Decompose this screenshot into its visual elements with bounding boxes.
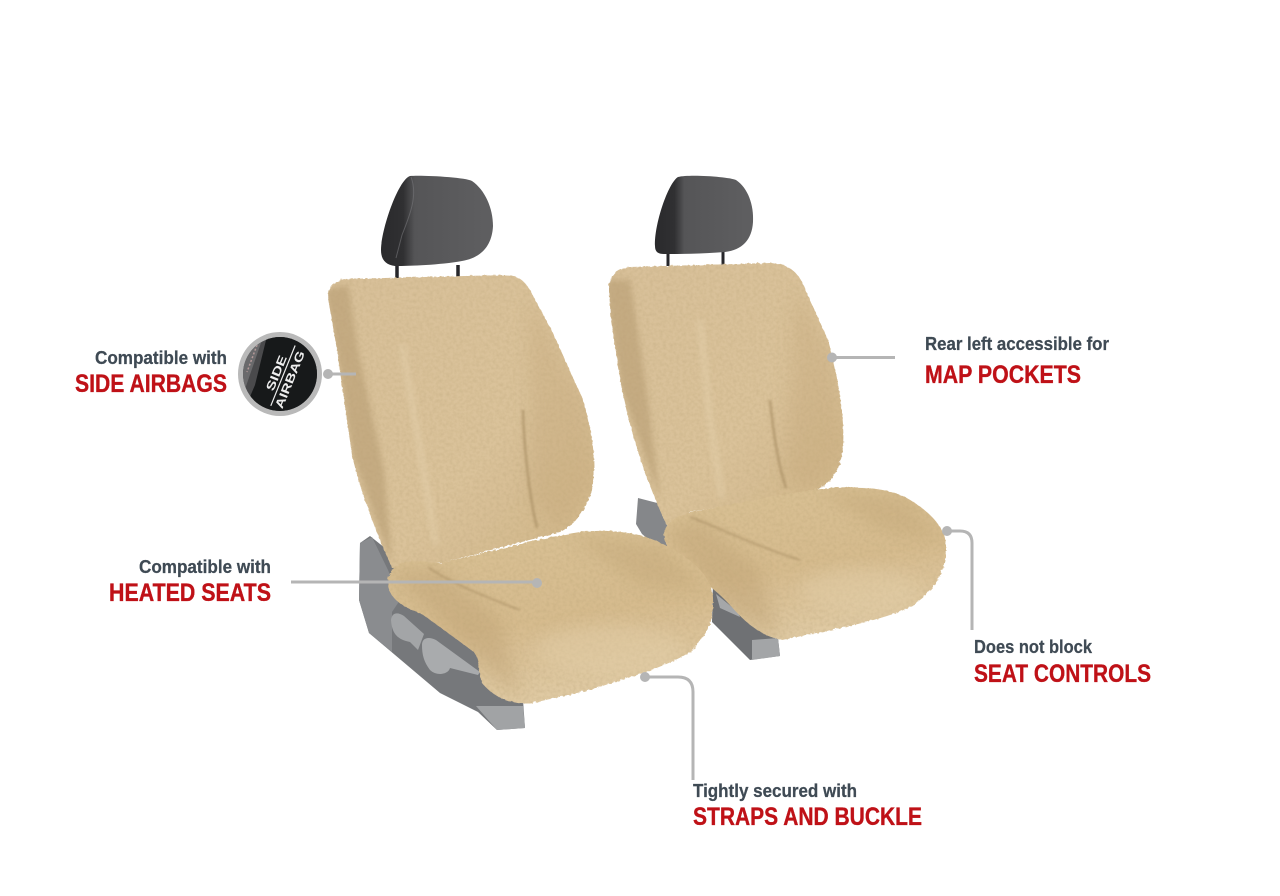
right seat back	[609, 263, 843, 528]
text: does not block seat controls: Does not block	[974, 637, 1093, 657]
right seat cushion	[664, 487, 946, 640]
text: rear left accessible for map pockets: MAP POCKETS	[925, 361, 1081, 389]
right seat base	[636, 498, 780, 660]
callout: seat controls	[942, 526, 1151, 688]
text: does not block seat controls	[974, 637, 1151, 688]
text: rear left accessible for map pockets	[925, 334, 1109, 389]
callout: side airbags	[75, 332, 356, 420]
pointer: straps and buckle	[640, 672, 693, 780]
text: compatible with side airbags	[75, 348, 227, 398]
text: compatible with side airbags: Compatible with	[95, 348, 227, 368]
left seat base	[359, 536, 525, 730]
callout: map pockets	[827, 334, 1109, 389]
right headrest	[655, 176, 753, 266]
text: compatible with heated seats: HEATED SEATS	[109, 579, 271, 607]
left cushion shading	[403, 531, 684, 684]
callout: straps and buckle	[640, 672, 922, 831]
right seat	[605, 176, 946, 660]
pointer: map pockets	[827, 352, 895, 362]
text: tightly secured with straps and buckle	[693, 781, 922, 831]
left back shading	[325, 285, 595, 565]
text: compatible with side airbags: SIDE AIRBAGS	[75, 370, 227, 398]
left headrest	[381, 176, 493, 278]
right back shading	[605, 280, 845, 500]
icon: side airbag badge	[236, 332, 325, 420]
pointer: side airbags	[323, 369, 356, 379]
text: tightly secured with straps and buckle: STRAPS AND BUCKLE	[693, 803, 922, 831]
left seat	[325, 176, 713, 730]
text: compatible with heated seats: Compatible with	[139, 557, 271, 577]
left seat back	[328, 275, 594, 568]
right cushion shading	[674, 488, 919, 632]
text: rear left accessible for map pockets: Rear left accessible for	[925, 334, 1109, 354]
infographic canvas	[76, 176, 1150, 826]
pointer: heated seats	[291, 578, 542, 588]
icon: side airbag badge: SIDE	[263, 353, 290, 393]
left seat cushion	[388, 531, 713, 704]
callout: heated seats	[109, 557, 542, 607]
icon: side airbag badge: AIRBAG	[272, 349, 308, 410]
text: tightly secured with straps and buckle: Tightly secured with	[693, 781, 857, 801]
pointer: seat controls	[942, 526, 972, 630]
text: does not block seat controls: SEAT CONTROLS	[974, 660, 1151, 688]
text: compatible with heated seats	[109, 557, 271, 607]
